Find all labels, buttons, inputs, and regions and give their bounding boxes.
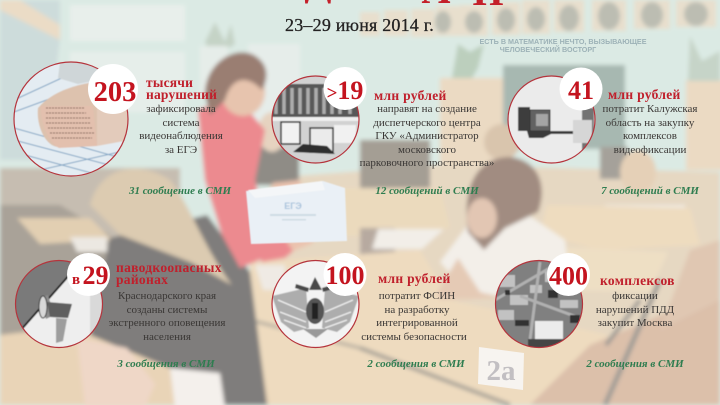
panel: 41 million video recording <box>505 68 699 197</box>
panel: 400 traffic recording systems <box>493 253 684 370</box>
photo ring <box>14 62 128 176</box>
description <box>596 290 675 329</box>
description: фиксации <box>612 290 658 302</box>
description: потратит ФСИН <box>379 290 455 302</box>
description <box>603 103 697 156</box>
photo: dispatch centre <box>272 76 358 162</box>
media count: 31 сообщение в СМИ <box>128 185 231 197</box>
panel: 100 million FSIN <box>270 253 467 370</box>
description: на разработку <box>384 304 450 316</box>
number badge: 100 <box>326 261 364 290</box>
description: область на закупку <box>606 117 695 129</box>
description <box>361 290 467 343</box>
heading: млн рублей <box>378 271 451 286</box>
description <box>139 103 223 156</box>
description: потратит Калужская <box>603 103 697 115</box>
description: направят на создание <box>377 103 477 115</box>
heading <box>146 75 217 102</box>
media count: 7 сообщений в СМИ <box>601 185 699 197</box>
photo: aerial view of city <box>496 261 582 347</box>
number badge <box>560 68 602 110</box>
description: зафиксировала <box>146 103 216 115</box>
girl in front left <box>90 215 267 405</box>
description: ГКУ «Администратор <box>375 130 479 142</box>
heading: млн рублей <box>374 88 447 103</box>
description: системы безопасности <box>361 331 467 343</box>
portraits <box>360 0 716 37</box>
media count: 2 сообщения в СМИ <box>366 358 465 370</box>
panel: 29 flood-prone districts <box>13 253 225 370</box>
heading: паводкоопасных <box>116 260 222 275</box>
heading: тысячи <box>146 75 193 90</box>
description: закупит Москва <box>598 317 672 329</box>
desk card 2a <box>478 347 524 390</box>
description: нарушений ПДД <box>596 304 675 316</box>
number badge <box>547 253 590 296</box>
description: интегрированной <box>376 317 458 329</box>
photo: handwritten crib on finger <box>14 62 128 176</box>
right student <box>440 216 570 296</box>
description: за ЕГЭ <box>165 144 197 156</box>
description: экстренного оповещения <box>109 317 225 329</box>
number badge <box>67 253 110 296</box>
description: созданы системы <box>127 304 208 316</box>
teacher <box>198 95 272 268</box>
description: диспетчерского центра <box>373 117 481 129</box>
description: населения <box>143 331 191 343</box>
heading: районах <box>116 272 168 287</box>
photo ring <box>508 76 595 163</box>
photo ring <box>272 76 359 163</box>
photo: traffic camera <box>508 76 594 162</box>
description: система <box>162 117 200 129</box>
heading: нарушений <box>146 87 217 102</box>
description: московского <box>398 144 456 156</box>
heading: комплексов <box>600 273 675 288</box>
description <box>109 290 225 343</box>
description <box>360 103 494 169</box>
description: комплексов <box>623 130 677 142</box>
panel: 203 thousand violations <box>10 60 231 197</box>
heading: млн рублей <box>608 87 681 102</box>
back rows <box>0 168 180 405</box>
number badge: 41 <box>568 76 594 105</box>
number badge <box>324 67 366 110</box>
photo: loudspeaker siren <box>16 261 102 347</box>
hand <box>77 338 155 405</box>
number badge: 203 <box>94 77 136 108</box>
panel: 19 million dispatch centre <box>270 67 494 197</box>
desks <box>340 188 450 236</box>
white exam paper: ЕГЭ <box>284 201 302 211</box>
title (cropped at top edge) <box>304 0 504 14</box>
description: Краснодарского края <box>118 290 216 302</box>
faint wall slogan: ЧЕЛОВЕЧЕСКИЙ ВОСТОРГ <box>500 45 596 54</box>
number badge: в <box>72 272 80 288</box>
photo ring <box>16 260 102 348</box>
desk card 2a: 2а <box>486 355 516 387</box>
heading <box>116 260 222 287</box>
photo ring <box>272 260 359 348</box>
media count: 12 сообщений в СМИ <box>375 185 479 197</box>
number badge: 400 <box>549 262 588 290</box>
media count: 2 сообщения в СМИ <box>585 358 684 370</box>
media count: 3 сообщения в СМИ <box>116 358 215 370</box>
number badge <box>88 64 138 114</box>
description: видеонаблюдения <box>139 130 223 142</box>
photo ring <box>496 260 582 348</box>
faint wall slogan: ЕСТЬ В МАТЕМАТИКЕ НЕЧТО, ВЫЗЫВАЮЩЕЕ <box>479 37 647 46</box>
description: парковочного пространства» <box>360 157 494 169</box>
description: видеофиксации <box>614 144 686 156</box>
date heading: 23–29 июня 2014 г. <box>285 15 434 35</box>
number badge: >19 <box>327 76 363 105</box>
white exam paper <box>246 181 347 244</box>
faint wall slogan <box>479 37 647 54</box>
photo: FSIN emblem <box>272 261 358 347</box>
number badge <box>324 253 366 296</box>
number badge: 29 <box>82 261 108 290</box>
